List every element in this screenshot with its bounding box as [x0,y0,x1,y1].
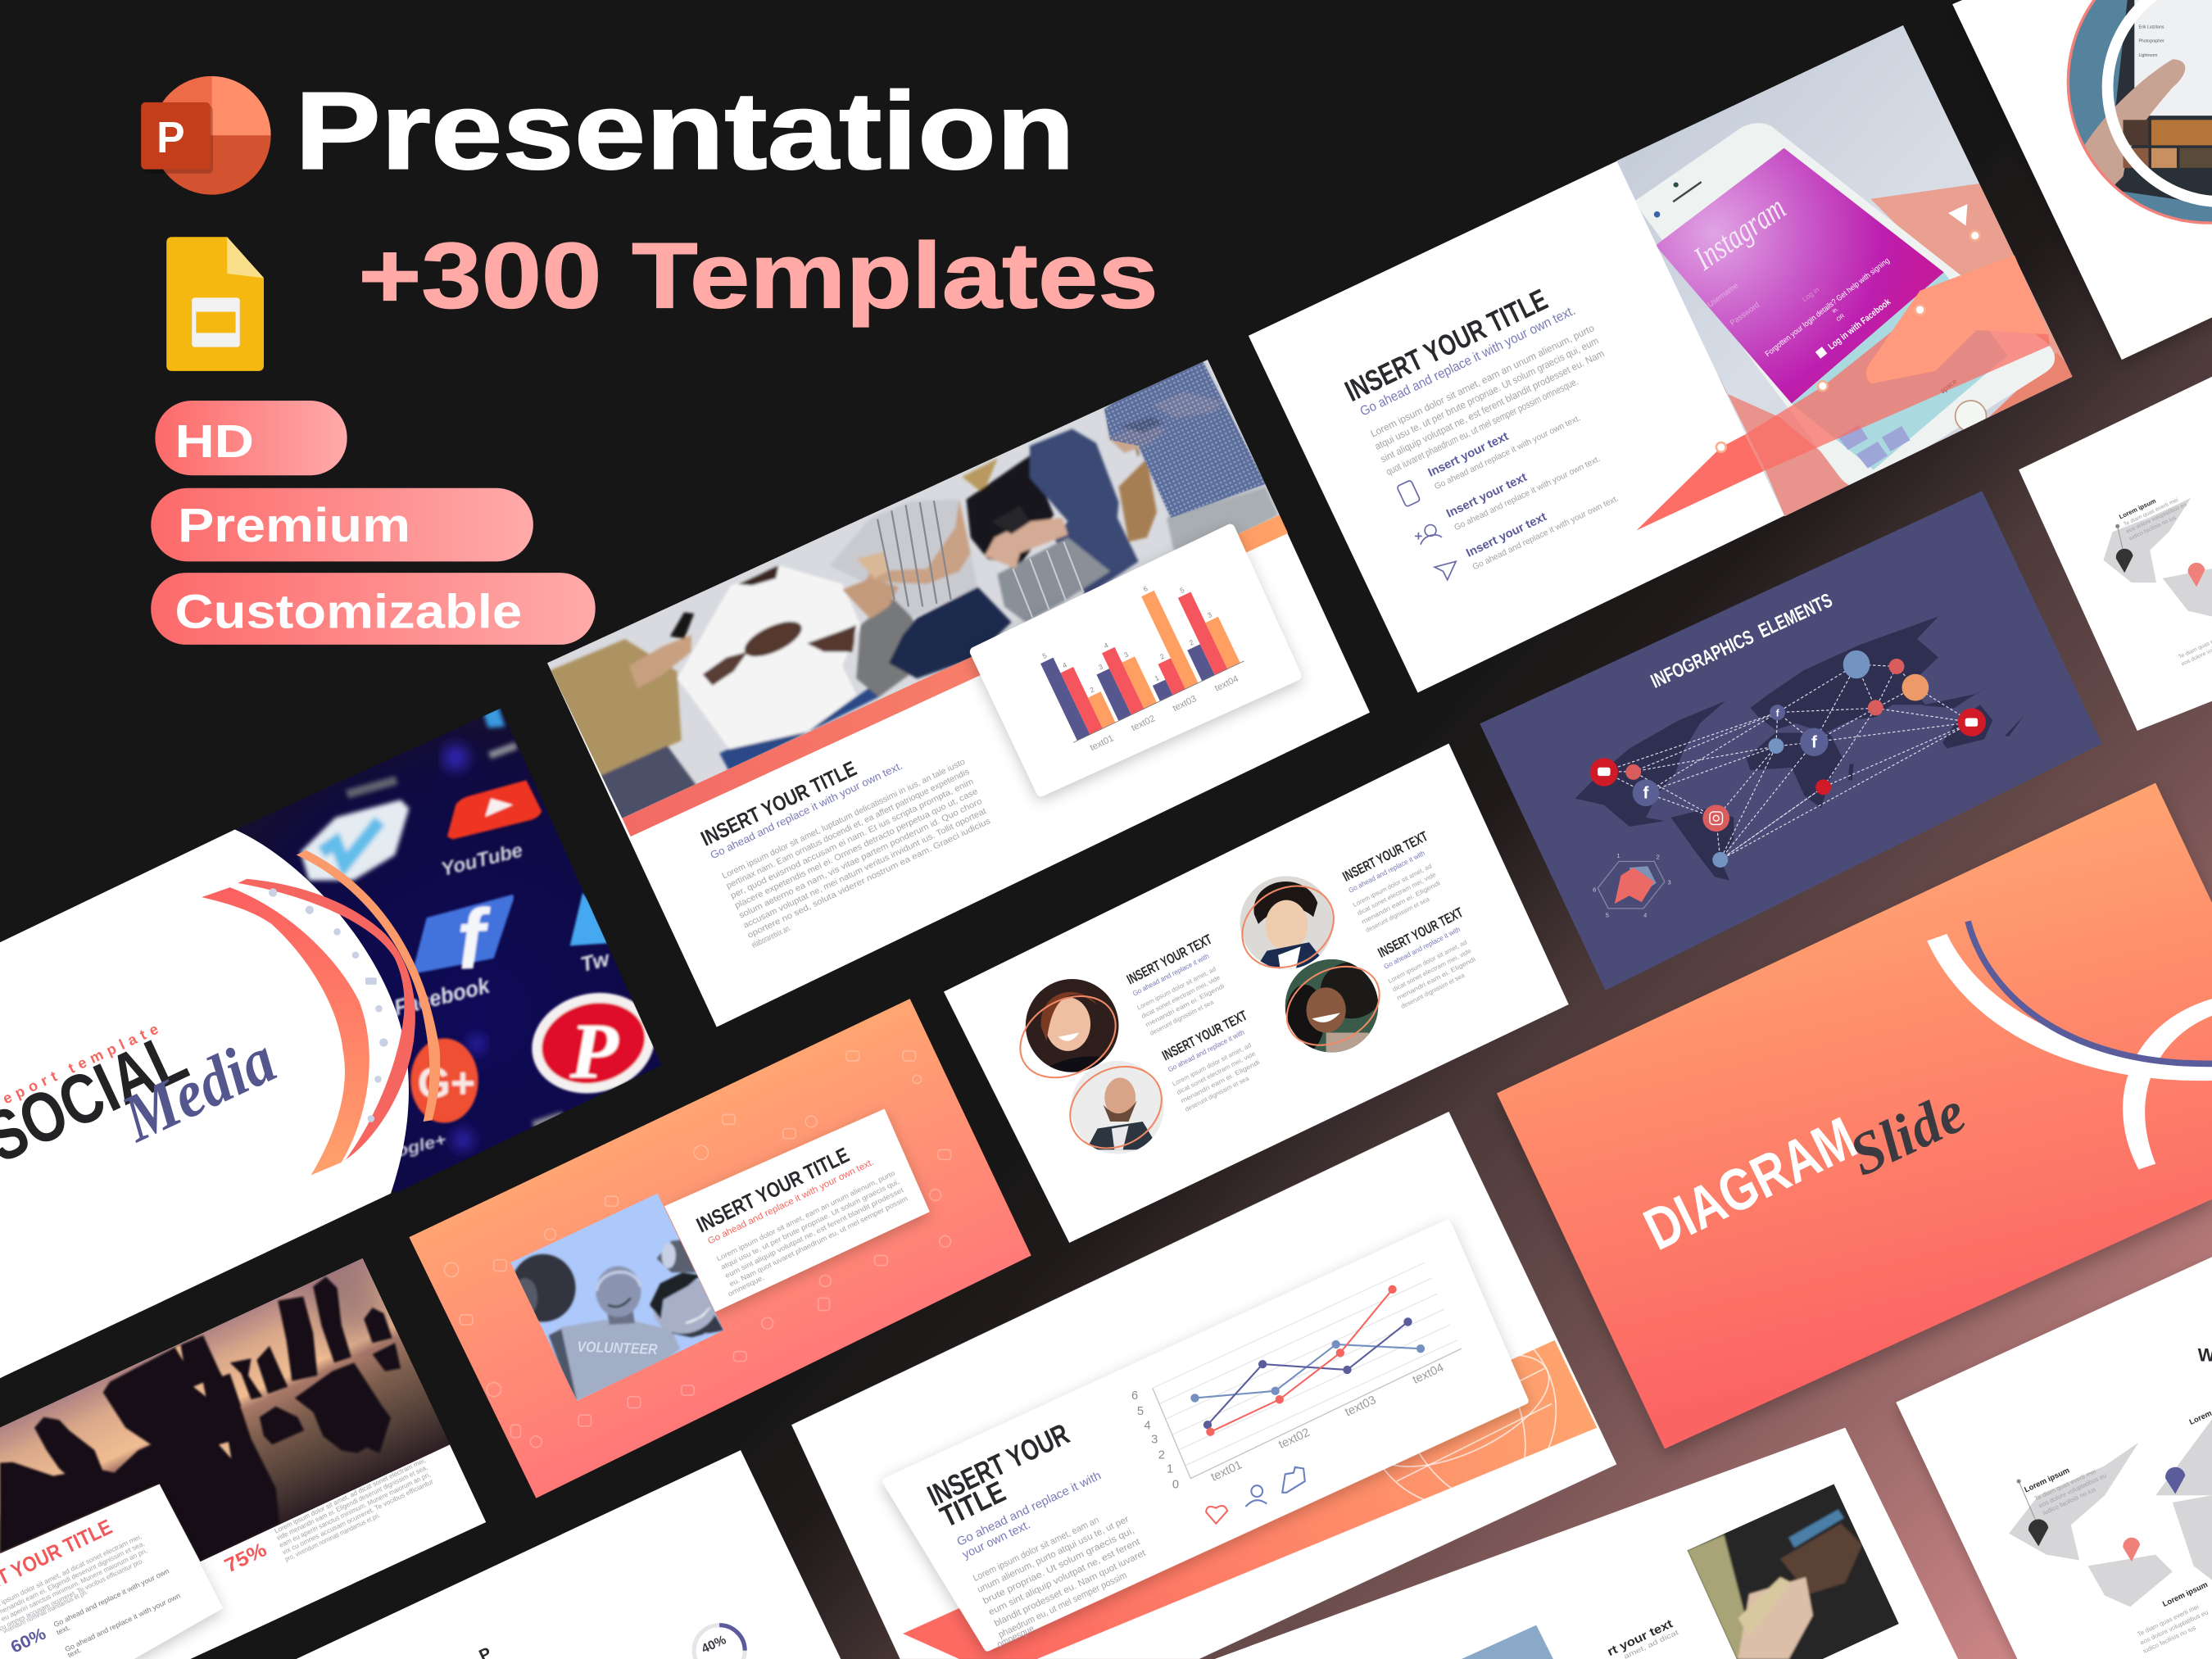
slide: right map [2019,377,2212,731]
map note [2118,497,2212,668]
faint icon pattern [444,1051,951,1448]
body text: placere expetendis mel ei. Omnes detracto perpetua quo ut, case [733,787,980,911]
body text: eu. Nam quot iuvaret phaedrum eu, ut mel semper possim [728,1194,909,1288]
75 percent text: vide menandri eam ei. Eligendi deserunt dignissim et sea, [275,1464,428,1542]
team text right top: menandri eam ei. Eligendi [1360,879,1442,926]
sunset photo [0,1249,465,1659]
body text: pertinax nam. Eam ornatus docendi et, ea affert patrioque expetendis [725,768,971,891]
chart body text: Lorem ipsum dolor sit amet, eam an [972,1516,1100,1584]
title: INSERT YOUR TITLE [693,1144,853,1237]
progress ring [694,1625,745,1659]
chart subtitle: Go ahead and replace it with [955,1469,1104,1549]
chart card [886,1223,1525,1650]
team text left bottom: dicat sonet electram mei, vide [1176,1050,1257,1096]
social nodes [1590,650,1986,868]
map labels [2023,1409,2212,1655]
network lines [1604,664,1972,860]
team text right bottom [1376,904,1477,1010]
radar chart: 5 [1606,911,1609,918]
y axis numbers: 6 [1131,1389,1138,1403]
body text: Lorem ipsum dolor sit amet, luptatum delicatissimi in ius, an tale iusto [721,758,967,881]
text block: rt your text [1606,1617,1675,1659]
bars: text03 [1172,694,1198,714]
y axis numbers: 1 [1167,1463,1173,1476]
chart title: TITLE [935,1474,1010,1534]
60 percent notes: text. [55,1623,71,1637]
radar chart: 2 [1657,854,1660,861]
bars: 2 [1158,652,1166,661]
login form text [1706,256,1893,359]
75 percent text: eam eu aperiri sanctus minimum. Munere maiorum an pri, [279,1471,432,1549]
body text: per, quod euismod accusam ei nam. Et ius scripta prompta, enim [729,777,975,901]
team text left top: menandri eam ei. Eligendi [1145,982,1226,1028]
team text left top: INSERT YOUR TEXT [1124,931,1215,987]
y axis numbers: 3 [1151,1434,1158,1447]
team text left bottom [1159,1007,1261,1113]
map note: Te diam quas everti mei [2123,497,2179,528]
instagram wordmark: Instagram [1687,188,1792,277]
red triangle translucent part [1745,309,2050,471]
bars: text04 [1213,674,1240,694]
body text: atqui usu te, ut per brute propriae. Ut solum graecis qui, eum [1373,335,1600,452]
login form text: Forgotten your login details? Get help with signing [1764,256,1892,359]
body text: Lorem ipsum dolor sit amet, eam an unum alienum, purto [715,1168,896,1262]
bars: 2 [1089,685,1096,695]
body text: sint aliquip volutpat ne, est ferent blandit prodesset eu. Nam [1379,347,1606,465]
list items: Insert your text [1444,471,1529,521]
social nodes: f [1811,733,1817,752]
map labels: Te diam quas everti mei [2033,1467,2097,1503]
white text card [664,1108,930,1312]
login form text: in. [1831,306,1840,315]
chart body text: unum alienum, purto atqui usu te, ut per [976,1514,1131,1595]
chart body text: brute propriae. Ut solum graecis qui, [981,1525,1136,1607]
bars: 3 [1122,650,1130,660]
map note: eos dolore voluptatibus eu [2126,501,2187,535]
map note: iudico facilisis no ius [2128,514,2178,542]
body text [715,1168,909,1298]
overlapping text card [0,1484,223,1659]
body text: accusam voluptat ne, mei natum veritus invidunt ius. Tollit oporteat [742,807,988,931]
75 percent text: pro, vivendum nominati mandamus et pri. [284,1512,381,1563]
team text left top [1124,931,1226,1037]
radar chart: 3 [1667,879,1671,886]
slide: far top right phone circle: Lightroom [2138,53,2157,58]
slide: volunteer orange [409,999,1031,1498]
duotone photo [501,1185,733,1411]
team text left top: deserunt dignissim et sea [1149,998,1215,1037]
y axis numbers: 0 [1172,1479,1179,1492]
portrait curly woman [1273,950,1394,1061]
x axis labels: text03 [1343,1394,1378,1419]
app icon photo: YouTube [439,839,525,881]
slide: sunset silhouettes [0,1249,486,1659]
social nodes: f [1776,708,1780,719]
list items: Go ahead and replace it with your own text. [1433,414,1582,492]
list items: Insert your text [1464,510,1549,560]
icon: powerpoint: P [156,114,185,162]
75 percent text: vix cu omnes accusam ocurreret. Te vocibus efficiantur [281,1478,435,1556]
team text right bottom: deserunt dignissim et sea [1399,972,1466,1010]
media script word: Media [110,1021,286,1157]
team text left top: Go ahead and replace it with [1131,952,1211,997]
map note: Lorem ipsum [2118,497,2157,520]
team text left bottom: Lorem ipsum dolor sit amet, ad [1171,1041,1253,1088]
heading: INFOGRAPHICS ELEMENTS [1648,589,1836,693]
card body text: vivendum nominati mandamus et pri. [2,1589,89,1635]
badge: customizable [151,573,596,645]
map labels: iudico facilisis no ius [2142,1624,2197,1655]
white ribbon second [2123,999,2212,1169]
list icons [1397,480,1456,580]
60 percent notes: Go ahead and replace it with your own [63,1591,182,1653]
slide: bottom center ring [297,1450,841,1659]
bars: 3 [1097,662,1104,672]
body text: eum sint aliquip volutpat ne, est ferent blandit prodesset [723,1185,905,1280]
slide: diagram cover [1497,783,2212,1448]
login form text: OR [1836,313,1846,323]
team text right top: INSERT YOUR TEXT [1339,827,1430,885]
gradient band [903,1340,1597,1659]
white triangle marker [1948,204,1967,226]
chart body text: eum sint aliquip volutpat ne, est ferent [987,1537,1142,1617]
app icon photo: Tw [578,947,613,977]
app icon photo: Facebook [392,972,493,1021]
badge: HD: HD [175,416,254,468]
red triangle solid part [1636,434,1763,530]
team text right top [1339,827,1442,934]
white cover shape [0,829,409,1378]
team text right bottom: menandri eam ei. Eligendi [1395,955,1477,1002]
bars: 1 [1154,673,1161,682]
map labels: eos dolore voluptatibus eu [2037,1471,2108,1510]
social nodes: f [1643,784,1649,803]
chart title [922,1416,1074,1534]
60 percent: 60% [7,1625,49,1657]
slide: far top right phone circle: Erik Lutzitans [2138,25,2164,29]
chart body text: blandit prodesset eu. Nam quot iuvaret [993,1548,1148,1629]
team text left bottom: deserunt dignissim et sea [1184,1074,1250,1113]
team text right bottom: Lorem ipsum dolor sit amet, ad [1387,938,1468,985]
body text: quot iuvaret phaedrum eu, ut mel semper possim omnesque. [1385,375,1580,478]
group photo [536,352,1298,832]
instagram photo: space [1938,377,1959,395]
x axis labels [1209,1362,1446,1484]
team text left top: dicat sonet electram mei, vide [1140,974,1222,1020]
team text left bottom: INSERT YOUR TEXT [1159,1007,1250,1063]
team text right top: Lorem ipsum dolor sit amet, ad [1352,863,1433,909]
radar chart [1593,852,1671,918]
instagram photo [1617,25,2073,516]
x axis labels: text02 [1276,1426,1312,1452]
app icon photo: G+ [418,1059,475,1107]
red thin crescent [238,879,415,1159]
bars: 5 [1041,651,1049,660]
slide: people with bar chart [536,352,1370,1027]
bar chart card [975,529,1296,791]
body text: atqui usu te, ut per brute propriae. Ut solum graecis qui, [719,1177,900,1271]
orange finger overlay [1866,256,2048,383]
slide: line chart [791,1112,1616,1659]
map labels: Te diam quas everti mei [2137,1602,2201,1638]
map pins [2115,524,2205,587]
login form text: Log in with Facebook [1827,297,1893,351]
list items: Go ahead and replace it with your own text. [1471,494,1620,572]
chart title: INSERT YOUR [922,1416,1074,1512]
60 percent notes: Go ahead and replace it with your own [52,1566,170,1629]
bars: text01 [1089,733,1115,753]
photo: blue crop [1462,1625,1553,1659]
badge: premium: Premium [178,499,410,552]
y axis numbers: 5 [1137,1405,1144,1418]
team text right top: dicat sonet electram mei, vide [1356,871,1437,917]
portrait woman [1019,979,1119,1078]
heading: 300 templates: +300 Templates [358,224,1158,328]
slide: far top right phone circle: Photographer [2138,39,2164,44]
white ribbon [1927,934,2212,1081]
bars: 4 [1061,660,1068,669]
y axis numbers [1131,1389,1179,1492]
diagram word: DIAGRAM [1634,1105,1866,1263]
x axis labels: text01 [1209,1458,1244,1484]
body text [721,758,992,950]
globe wireframe [1355,1300,1565,1521]
slide: people team [944,743,1569,1243]
slide: bottom right world map [1896,1257,2212,1659]
slide script word: Slide [1840,1079,1975,1189]
75 percent: 75% [221,1539,270,1577]
team text right bottom: INSERT YOUR TEXT [1376,904,1466,961]
reaction icons [1206,1467,1305,1524]
slide: social media cover [0,698,678,1378]
gradient band [622,515,1288,836]
badge: premium [151,488,533,561]
slide: far top right phone circle [1952,0,2212,360]
map labels: Lorem ipsum [2023,1466,2071,1495]
slide: instagram title and icons [1249,14,2087,692]
portrait bearded man [1055,1050,1176,1164]
map labels: iudico facilisis no ius [2042,1485,2097,1516]
world map [1562,616,2024,880]
login form text: Password [1729,301,1761,328]
subtitle: Go ahead and replace it with your own text. [708,759,904,861]
icon: powerpoint [141,76,271,195]
login form text: Log in [1801,285,1821,303]
title: INSERT YOUR TITLE [697,757,860,851]
bars [1025,560,1252,759]
volunteer shirt text: VOLUNTEER [577,1339,658,1358]
app icon photo: f [455,891,496,987]
slide: infographics elements [1480,491,2102,990]
clothing texture [877,501,951,606]
bars: 4 [1103,641,1110,650]
app icon photo [226,698,678,1206]
badge: HD [155,401,347,475]
icon: google slides [166,237,264,371]
team text right bottom: Go ahead and replace it with [1382,925,1462,971]
arc icons [269,888,388,1122]
bars: 3 [1206,610,1213,619]
photo: hands with phone [1688,1484,1899,1659]
team text left bottom: menandri eam ei. Eligendi [1180,1058,1261,1104]
chart body text: phaedrum eu, ut mel semper possim [997,1571,1129,1640]
title: INSERT YOUR TITLE [1339,283,1552,408]
team text right bottom: dicat sonet electram mei, vide [1391,947,1472,993]
app icon photo: ogle+ [394,1131,448,1161]
bars: text02 [1130,714,1157,733]
subtitle: Go ahead and replace it with your own text. [1358,303,1578,419]
body text: oportere no sed, soluta viderer nostrum ea eam. Graeci iudicius [746,817,992,941]
map labels: eos dolore voluptatibus eu [2139,1608,2210,1647]
60 percent notes: text. [66,1646,83,1659]
75 percent text: Lorem ipsum dolor sit amet, ad dicat sonet electram mei, [274,1457,427,1535]
heading: presentation: Presentation [295,70,1075,193]
navy ribbon [1968,921,2212,1063]
team text right top: Go ahead and replace it with [1347,849,1426,895]
grey world map [2009,1419,2212,1607]
bars: 2 [1188,638,1195,647]
slide: bottom phone photo [1215,1428,1958,1659]
app icon photo: P [569,1008,619,1095]
radar chart: 6 [1593,886,1596,893]
portrait young man [1227,870,1349,984]
login form text: Username [1706,281,1740,310]
body text: elaboraretvix an. [750,924,792,950]
map labels: Lorem ipsum [2161,1580,2210,1609]
radar chart: 4 [1643,911,1648,918]
series lines [1194,1290,1421,1432]
team text left bottom: Go ahead and replace it with [1167,1028,1246,1073]
badge: customizable: Customizable [175,585,522,638]
team text right top: deserunt dignissim et sea [1364,895,1431,934]
big crescent [202,887,369,1175]
x axis labels: text04 [1411,1362,1446,1387]
list items: Insert your text [1426,430,1511,480]
axes [1153,1349,1462,1479]
bars: 5 [1179,586,1185,595]
y axis numbers: 2 [1158,1448,1165,1462]
body text: solum aeterno ea nam, vis vitae partem ponderum id. Quo choro [738,797,984,921]
progress ring: 40% [700,1633,728,1657]
grid lines [1153,1262,1457,1466]
chart body text [972,1514,1148,1650]
orange thin arc [297,850,440,1122]
grey map [2103,498,2212,616]
body text: Lorem ipsum dolor sit amet, eam an unum alienum, purto [1369,322,1597,440]
timeline dots [1716,231,1980,452]
team text left top: Lorem ipsum dolor sit amet, ad [1135,965,1217,1012]
y axis numbers: 4 [1144,1419,1151,1432]
bars: 6 [1142,584,1149,593]
list items [1426,414,1620,572]
body text: omnesque. [727,1273,765,1298]
subtitle: Go ahead and replace it with your own text. [706,1158,876,1246]
chart body text: omnesque. [995,1623,1038,1650]
chart subtitle: your own text. [961,1518,1032,1562]
60 percent notes [52,1566,182,1659]
series markers [1190,1285,1425,1436]
radar chart: 1 [1616,852,1620,859]
list items: Go ahead and replace it with your own text. [1453,455,1602,533]
map pins [2017,1467,2185,1562]
